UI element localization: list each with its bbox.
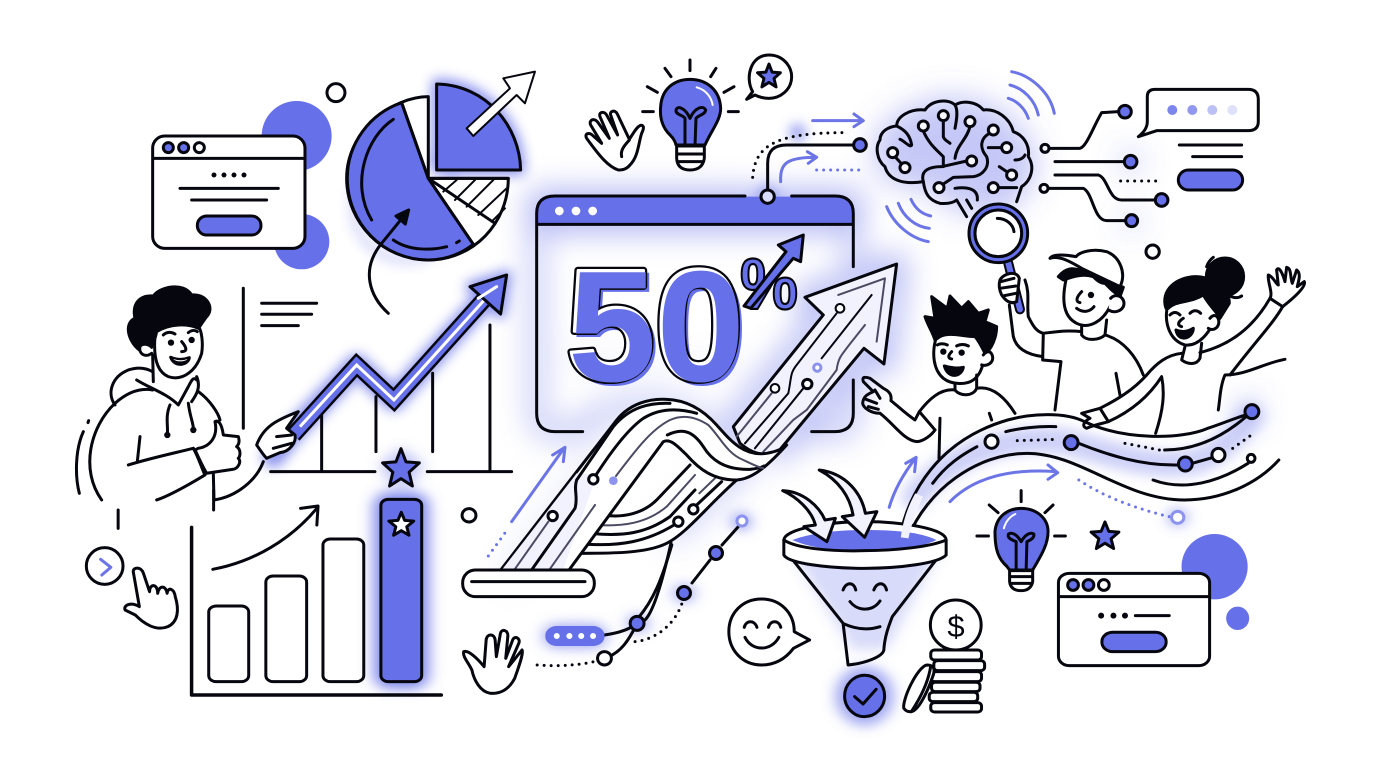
lightbulb [643,60,738,170]
lightbulb [977,491,1065,591]
connector pill and nodes [537,545,682,666]
panel: 50 percent browser window [537,196,853,432]
bars [209,499,422,682]
panel: bar chart and pointer [86,490,682,695]
decorative blue circles [1182,534,1249,630]
face [140,327,202,378]
window header bar [537,197,853,223]
arrows entering funnel [783,470,877,542]
flowing data ribbon [900,405,1279,538]
header dots [555,207,597,215]
person: boy pointing [863,296,1015,458]
funnel with face [784,522,946,665]
star speech bubble [747,55,792,99]
big number 50 percent: 50 [570,241,747,417]
small ring [1146,245,1159,258]
thumbs up hand [195,421,240,473]
big number 50 percent: 50 [566,237,743,413]
three people on the right [863,204,1305,458]
top centre icons and connectors [586,55,866,203]
arrow through percent sign [744,235,803,308]
chevron button [86,548,123,584]
blue flow arrows [889,457,1184,523]
zigzag growth arrow [293,275,507,435]
small ring [462,509,476,522]
rising line chart with arrow [243,275,512,486]
star on highlighted bar [389,512,414,535]
sound wave arcs [887,72,1054,242]
hoodie body [76,355,263,500]
coin stack [904,600,985,712]
person: boy with cap and magnifier [1009,250,1143,410]
connector nodes rising to ring [678,516,747,600]
smiley speech bubble [729,599,810,665]
check badge [845,675,885,717]
blue rising arrow beside ramp [488,447,565,556]
big number 50 percent: 50 [566,237,743,413]
hair [128,287,210,350]
connector lines with arrows [753,114,866,203]
speech bubble with dots [1138,89,1258,137]
presenter person with hoodie [76,287,263,500]
stream rising out of funnel [901,493,923,538]
star [1091,522,1119,549]
magnifying glass [969,204,1028,309]
brain outline and circuits [877,101,1032,217]
star [383,449,419,486]
soft glow background layer [273,83,1256,719]
small ring [327,84,345,102]
window frame [537,196,853,432]
text lines and button [1178,145,1243,190]
pie chart [347,97,508,313]
circuit connectors [1040,105,1168,227]
brain with circuit lines [877,72,1258,258]
legend lines [262,303,317,326]
line to pill [645,543,671,620]
chart axes [192,527,441,695]
waving hand [586,111,643,170]
upper arrow shaft and head [733,264,897,454]
chart axes and grid [243,288,512,472]
lower body lines [118,490,214,528]
pointing hand [257,412,298,458]
panel: top-left cluster with window and pie chart [153,72,535,313]
browser window card [153,136,305,248]
lower band behind ribbon [580,465,737,553]
decorative blue circles behind window [262,101,332,269]
dollar sign on coin: $ [947,609,965,644]
browser window card [1058,573,1210,666]
twisting ribbon ramp [493,399,787,580]
large circuit arrow with twisting ribbon [463,264,897,620]
trend arrow [213,506,318,569]
big number 50 percent: % [740,245,798,325]
flowing ribbon, funnel and lower right icons [729,405,1279,717]
waving hand [464,630,522,693]
big number 50 percent: 50 [568,239,745,415]
person: girl waving [1082,257,1305,433]
detached pie slice with arrow [437,72,535,170]
tap hand [125,568,177,628]
ramp base plate [463,570,594,597]
